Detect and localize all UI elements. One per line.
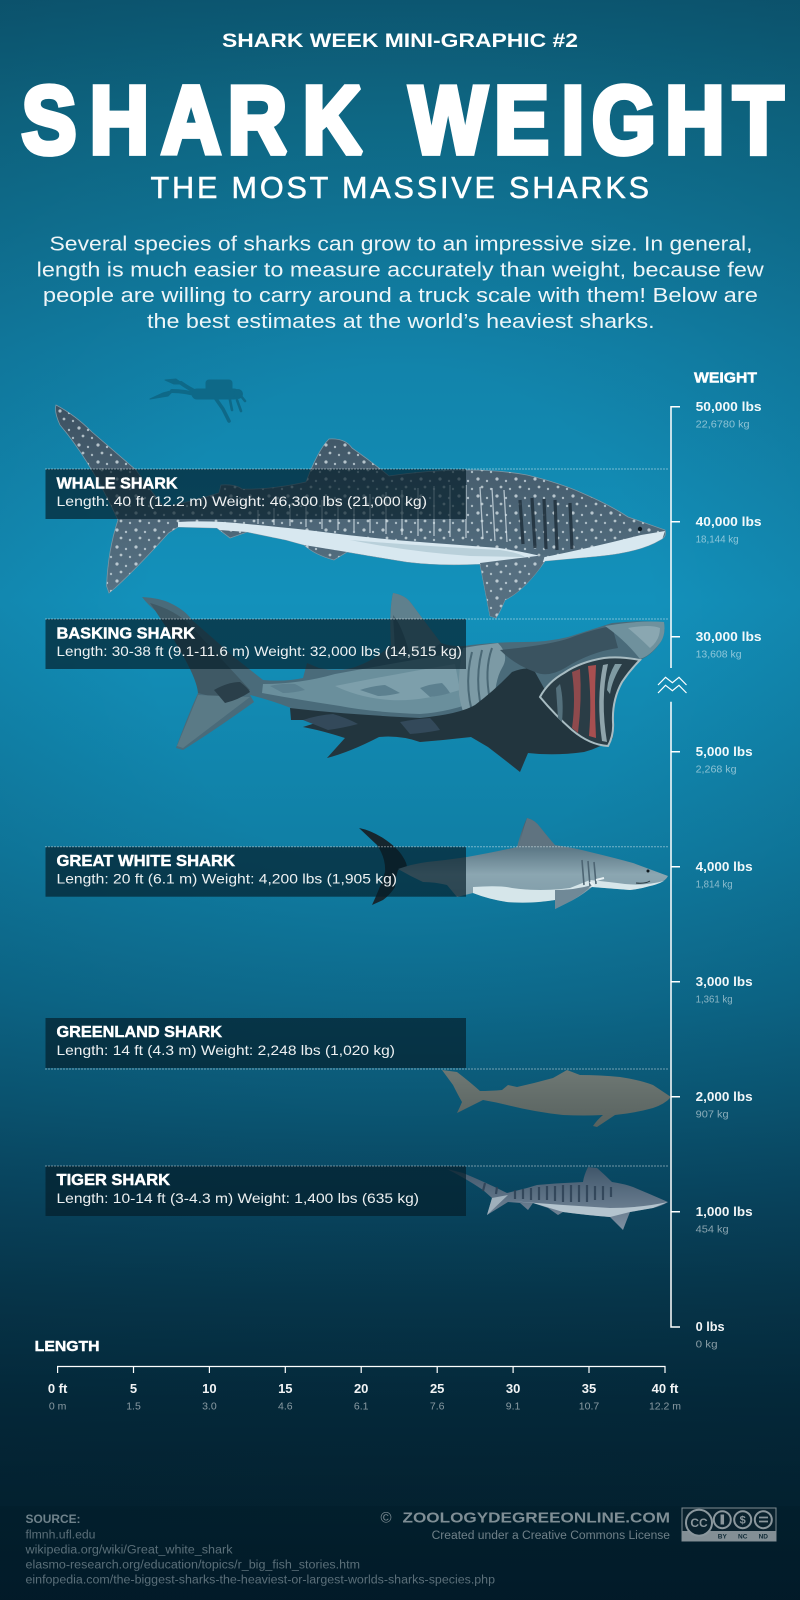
weight axis: 22,6780 kg bbox=[696, 419, 750, 431]
header kicker: SHARK WEEK MINI-GRAPHIC #2 bbox=[222, 30, 578, 52]
weight axis: 30,000 lbs bbox=[696, 629, 762, 644]
length axis: 7.6 bbox=[430, 1401, 445, 1413]
basking shark dark underside bbox=[290, 668, 613, 772]
label: basking shark: Length: 30-38 ft (9.1-11.6 m) Weight: 32,000 lbs (14,515 kg) bbox=[56, 643, 462, 659]
illustration: whale shark bbox=[50, 400, 670, 625]
label: greenland shark: Length: 14 ft (4.3 m) Weight: 2,248 lbs (1,020 kg) bbox=[56, 1042, 395, 1058]
intro paragraph: people are willing to carry around a truck scale with them! Below are bbox=[43, 285, 758, 307]
great white pectoral fin bbox=[555, 885, 592, 909]
weight axis bbox=[658, 370, 762, 1351]
credit: website: ZOOLOGYDEGREEONLINE.COM bbox=[402, 1510, 670, 1527]
basking shark head tones bbox=[500, 626, 618, 674]
length axis: 40 ft bbox=[652, 1381, 679, 1396]
basking shark dorsal fin bbox=[390, 593, 441, 660]
credit: website bbox=[380, 1510, 670, 1542]
label: whale shark bbox=[46, 469, 669, 519]
label: greenland shark: GREENLAND SHARK bbox=[56, 1024, 222, 1041]
whale shark flank stripes bbox=[258, 485, 507, 542]
whale shark gill slits bbox=[520, 498, 572, 550]
label: greenland shark bbox=[46, 1018, 669, 1069]
intro paragraph: length is much easier to measure accurately than weight, because few bbox=[37, 259, 764, 281]
length axis: 25 bbox=[430, 1381, 444, 1396]
sources list: wikipedia.org/wiki/Great_white_shark bbox=[24, 1544, 233, 1556]
sources list: SOURCE: bbox=[26, 1514, 80, 1526]
weight axis: 18,144 kg bbox=[696, 534, 739, 546]
great white tail bbox=[359, 828, 407, 905]
intro paragraph: Several species of sharks can grow to an impressive size. In general, bbox=[50, 234, 752, 256]
credit: website: Created under a Creative Commons License bbox=[432, 1530, 670, 1542]
label: tiger shark: Length: 10-14 ft (3-4.3 m) Weight: 1,400 lbs (635 kg) bbox=[56, 1190, 419, 1206]
basking shark mouth bbox=[540, 657, 640, 746]
length axis: 5 bbox=[130, 1381, 137, 1396]
length axis bbox=[35, 1338, 681, 1413]
length axis: 9.1 bbox=[506, 1401, 521, 1413]
length axis: 10.7 bbox=[579, 1401, 599, 1413]
subtitle: THE MOST MASSIVE SHARKS bbox=[150, 171, 649, 205]
length axis heading: LENGTH bbox=[35, 1338, 100, 1355]
length axis: 4.6 bbox=[278, 1401, 293, 1413]
label: tiger shark bbox=[46, 1166, 669, 1216]
sources list: elasmo-research.org/education/topics/r_big_fish_stories.htm bbox=[26, 1560, 360, 1572]
intro paragraph bbox=[37, 234, 764, 333]
length axis: 15 bbox=[278, 1381, 293, 1396]
weight axis heading: WEIGHT bbox=[694, 370, 757, 387]
label: great white shark: Length: 20 ft (6.1 m) Weight: 4,200 lbs (1,905 kg) bbox=[56, 871, 397, 887]
great white belly bbox=[473, 880, 664, 903]
weight axis: 1,000 lbs bbox=[696, 1204, 753, 1219]
icon: creative commons badge: $ bbox=[740, 1514, 746, 1526]
weight axis: 3,000 lbs bbox=[696, 974, 753, 989]
basking shark tail tones bbox=[150, 603, 250, 700]
length axis: 12.2 m bbox=[649, 1401, 681, 1413]
icon: creative commons badge: ND bbox=[759, 1534, 768, 1540]
main title: SHARK WEIGHT bbox=[22, 67, 783, 173]
weight axis: 1,814 kg bbox=[696, 879, 733, 891]
whale shark pectoral fin bbox=[480, 555, 545, 618]
length axis: 0 ft bbox=[48, 1381, 68, 1396]
basking shark gill bands bbox=[459, 643, 505, 738]
length axis: 1.5 bbox=[126, 1401, 141, 1413]
weight axis: 907 kg bbox=[696, 1109, 729, 1121]
tiger stripes bbox=[483, 1183, 611, 1202]
weight axis: 13,608 kg bbox=[696, 649, 742, 661]
weight axis: 1,361 kg bbox=[696, 994, 733, 1006]
weight axis: 40,000 lbs bbox=[696, 514, 762, 529]
basking shark lighter flank bbox=[262, 650, 480, 714]
length axis: 30 bbox=[506, 1381, 520, 1396]
illustration: basking shark bbox=[142, 593, 664, 772]
label: whale shark: WHALE SHARK bbox=[56, 475, 178, 492]
length axis: 35 bbox=[582, 1381, 596, 1396]
label: basking shark bbox=[46, 619, 669, 669]
icon: scuba diver silhouette bbox=[150, 379, 245, 421]
icon: creative commons badge: NC bbox=[738, 1534, 748, 1540]
label: basking shark: BASKING SHARK bbox=[56, 625, 195, 642]
icon: creative commons badge: CC bbox=[690, 1516, 708, 1530]
weight axis: 50,000 lbs bbox=[696, 399, 762, 414]
label: great white shark: GREAT WHITE SHARK bbox=[56, 853, 235, 870]
label: great white shark bbox=[46, 847, 669, 897]
weight axis: 5,000 lbs bbox=[696, 744, 753, 759]
weight axis: 454 kg bbox=[696, 1224, 729, 1236]
icon: creative commons badge bbox=[682, 1508, 776, 1541]
illustration: greenland shark bbox=[442, 1070, 671, 1127]
illustration: great white shark bbox=[359, 818, 668, 909]
weight axis: 2,000 lbs bbox=[696, 1089, 753, 1104]
label: whale shark: Length: 40 ft (12.2 m) Weight: 46,300 lbs (21,000 kg) bbox=[56, 493, 427, 509]
label: tiger shark: TIGER SHARK bbox=[56, 1172, 170, 1189]
axis break zigzag bbox=[658, 677, 686, 693]
sources list: einfopedia.com/the-biggest-sharks-the-heaviest-or-largest-worlds-sharks-species.php bbox=[26, 1574, 495, 1586]
length axis: 20 bbox=[354, 1381, 368, 1396]
sources list bbox=[24, 1514, 495, 1586]
icon: creative commons badge: BY bbox=[718, 1534, 727, 1540]
length axis: 0 m bbox=[49, 1401, 67, 1413]
weight axis: 0 lbs bbox=[696, 1319, 725, 1334]
weight axis: 2,268 kg bbox=[696, 764, 737, 776]
illustration: tiger shark bbox=[447, 1167, 668, 1230]
weight axis: 0 kg bbox=[696, 1339, 718, 1351]
length axis: 3.0 bbox=[202, 1401, 217, 1413]
length axis: 10 bbox=[202, 1381, 217, 1396]
intro paragraph: the best estimates at the world’s heaviest sharks. bbox=[147, 311, 655, 333]
length axis: 6.1 bbox=[354, 1401, 369, 1413]
credit: website: © bbox=[380, 1510, 392, 1527]
sources list: flmnh.ufl.edu bbox=[26, 1530, 96, 1542]
whale shark white belly bbox=[178, 521, 665, 565]
weight axis: 4,000 lbs bbox=[696, 859, 753, 874]
